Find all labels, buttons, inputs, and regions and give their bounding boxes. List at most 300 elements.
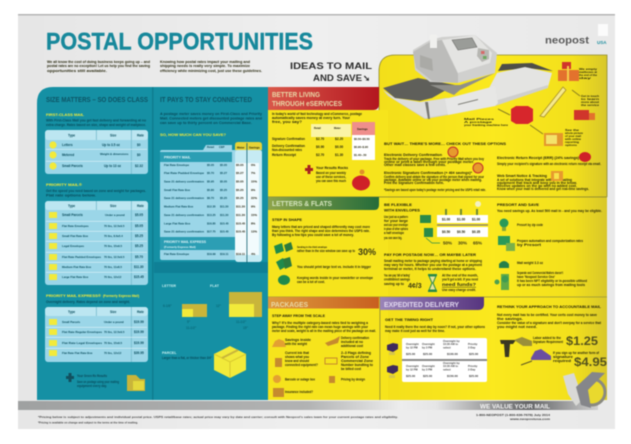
list: package tips: shows what you <box>285 355 309 359</box>
text: presort and save: PRESORT AND SAVE <box>497 203 540 207</box>
table: first-class mail: $2.32 <box>135 164 143 168</box>
list: letter tips: Keeping words inside in your newsletter or envelope <box>297 276 373 280</box>
table: savings comparison: 7% <box>251 171 256 175</box>
table: savings comparison: (Formerly Express Mail) <box>164 245 196 249</box>
table: envelope savings: 65% <box>473 240 482 246</box>
table: savings comparison: Savings <box>249 146 260 150</box>
text: pay for postage now or maybe later: Small mailing meter to package paying starting at home or shipping <box>384 259 482 263</box>
text: pay for postage now or maybe later: terminal or meter, it helps to understand these options. <box>384 267 476 271</box>
table: priority mail: Small Flat Rate Box <box>62 234 89 238</box>
table: savings comparison: Meter <box>237 146 245 150</box>
table: envelope savings: $1.00 <box>442 218 450 222</box>
option: electronic signature confirmation: Electronic Signature Confirmation (+ 46¢ savings)* <box>384 171 472 175</box>
icon: computer screen: whole picture <box>565 132 584 135</box>
table: savings comparison: $19.11 <box>220 252 229 256</box>
text: be flexible with envelopes: BE FLEXIBLE <box>384 203 413 207</box>
text: presort and save: It has been NFT eligibility or in-possible utilised <box>517 279 587 283</box>
table: expedited delivery: $25.00 <box>469 352 479 356</box>
text: step away from the scale: Why? It's the multiple category-based rates tied to weighing a <box>272 321 368 325</box>
table: priority mail express: 70 lbs, 12x12 <box>104 351 122 355</box>
table: savings comparison: Save 21 delivery confirmation <box>164 230 204 234</box>
table: priority mail express: $19.99 <box>134 341 144 345</box>
list: letter tips: You should print large text vs. include it in bigger <box>297 265 372 269</box>
table: expedited delivery: by 12 PM <box>406 368 418 372</box>
table: savings comparison: $17.75 <box>207 230 216 234</box>
text: be flexible with envelopes: in place of other options <box>384 227 408 231</box>
table: eservices savings: Return Receipt <box>272 153 297 157</box>
eservices intro: automatically saves money at every turn. Your <box>272 116 351 120</box>
icon: delivery van: to learn <box>581 97 600 101</box>
table: priority mail <box>45 201 148 285</box>
text: be flexible with envelopes: Use just as a pattern <box>384 215 408 219</box>
table: expedited delivery: $25.00 <box>469 374 479 378</box>
table: priority mail express: Flat Rate Flat Rate Box <box>62 351 93 355</box>
list: package tips: with the weight <box>284 342 308 346</box>
text: step away from the scale <box>272 314 376 333</box>
option: electronic signature confirmation: Print the Signature Confirmation form. <box>384 181 444 185</box>
footer text: *Pricing is available on change and subject to the terms at the time of mailing. <box>38 420 138 424</box>
text: step in shape <box>272 218 370 237</box>
intro text: Knowing how postal rates impact your mailing and <box>160 60 250 64</box>
table: expedited delivery: $100.00 <box>447 352 458 356</box>
table: expedited delivery: $25.00 <box>423 352 433 356</box>
table: expedited delivery: by 3 PM <box>422 368 433 372</box>
text: pay for postage now or maybe later: Use easy charge credit. <box>442 288 476 292</box>
callout: your green results <box>66 373 145 391</box>
table: first-class mail: $0 <box>137 143 141 147</box>
header: packages <box>268 297 379 309</box>
table: priority mail: 70 lbs, 12.5x9.5 <box>104 224 125 228</box>
table: eservices savings: $2.20 <box>335 137 343 141</box>
diagram: flat: 12" <box>216 304 222 308</box>
list: package tips: Commercial Zone <box>341 359 373 363</box>
table: savings comparison: $5.05 <box>236 163 244 167</box>
text: presort and save: by Presort <box>517 243 542 247</box>
table: savings comparison: $12.35 <box>207 204 216 208</box>
icon: delivery van: the service <box>581 103 600 107</box>
table: first-class mail: Metered <box>62 153 74 157</box>
table: priority mail: 70 lbs, 11x8.5 <box>104 265 122 269</box>
table: expedited delivery: $25.00 <box>406 374 416 378</box>
icon: computer screen: options <box>565 144 578 147</box>
text: rethink your approach: the savings. <box>497 317 523 321</box>
text: step in shape: STEP IN SHAPE <box>272 218 302 222</box>
text: step in shape: than you think. The right shape and size determines the USPS rate. <box>272 229 370 233</box>
table: priority mail: Size <box>110 204 117 208</box>
list: letter tips: Sending in the third envelope <box>297 245 327 249</box>
table: envelope savings: $1.00 <box>472 218 480 222</box>
bottom band <box>18 401 598 410</box>
table: savings comparison: $15.45 <box>236 230 246 234</box>
table: expedited delivery: select <box>443 368 451 372</box>
price callout: stapler 1.25: Signature Requirement <box>533 340 564 344</box>
table: priority mail: Rate <box>137 204 144 208</box>
text: step in shape: By following a few tips you could save a lot of money. <box>272 233 354 237</box>
callout: your green results: equipment every day. <box>77 384 107 388</box>
heading: ideas to mail and save: ➘ <box>363 73 370 83</box>
table: expedited delivery: Overnight <box>406 342 419 346</box>
option: but wait heading: BUT WAIT… THERE'S MORE… CHECK OUT THESE OPTIONS <box>384 142 507 146</box>
icon: pencil connector <box>540 87 566 117</box>
table: savings comparison: $5.25 <box>220 196 227 200</box>
table: eservices savings: Delivery Confirmation <box>272 144 305 148</box>
table: savings comparison: PRIORITY MAIL EXPRESS <box>164 240 207 244</box>
intro text: efficiency while minimizing cost, just use these guidelines. <box>160 69 262 73</box>
price callout: purple 4.95: If you sign up for another form of <box>553 351 600 355</box>
table: first-class mail: Letters <box>62 143 73 147</box>
table: first-class mail: Up to 13 oz <box>104 164 121 168</box>
option: electronic delivery confirmation: Other mail classes save a few cents. <box>384 163 446 167</box>
text: pay for postage now or maybe later: saving up to <box>384 282 404 286</box>
diagram: flat <box>210 284 262 330</box>
table: priority mail: Medium Flat Rate Box <box>62 265 92 269</box>
table: priority mail: $15.45 <box>134 275 144 279</box>
stay connected text: A postage meter saves money on First-Class and Priority <box>160 112 262 116</box>
heading: it pays to stay connected: IT PAYS TO STAY CONNECTED <box>160 97 252 104</box>
text: presort and save: Prepare automation and computerization rates <box>517 239 583 243</box>
table: eservices savings: $0.90 <box>316 145 324 149</box>
neopost logo: neopost <box>545 34 590 46</box>
table: priority mail: $5.05 <box>135 213 143 217</box>
table: priority mail: $5.25 <box>135 234 143 238</box>
text: get the timing right: GET THE TIMING RIGHT <box>385 318 434 322</box>
table: eservices savings: $2.70 <box>316 137 324 141</box>
table: savings comparison: $11.30 <box>220 213 229 217</box>
option: electronic signature confirmation: *Savings are based upon today's postage meter pricing and the USPS retail rate. <box>384 188 486 192</box>
table: priority mail: 70 lbs, 15x9.5 <box>104 244 122 248</box>
text: rethink your approach: you might not need. <box>497 325 537 329</box>
text: presort and save: Mail weight 3.3 oz <box>517 261 543 265</box>
table: priority mail express: Under a pound <box>104 320 124 324</box>
tagline: we value your mail: WE VALUE YOUR MAIL <box>480 404 550 410</box>
tagline: we value your mail <box>476 404 551 421</box>
icon: computer screen: of your mail <box>565 135 581 138</box>
text: step away from the scale: STEP AWAY FROM THE SCALE <box>272 314 325 318</box>
text: pay for postage now or maybe later: may vary for hours. Whether you use the postage at a payment <box>384 263 483 267</box>
table: priority mail: Large Flat Rate Box <box>62 275 89 279</box>
panel: teal <box>37 87 268 400</box>
table: savings comparison: CBP <box>219 145 225 149</box>
option: electronic return receipt: Simply your recipient's signature with an electronic return receipt via email. <box>497 162 601 166</box>
table: savings comparison: $19.99 <box>207 252 216 256</box>
priority mail intro: Flat rate options below. <box>46 194 96 198</box>
table: eservices savings: Meter <box>334 127 341 130</box>
table: eservices savings: $0.00 <box>335 145 343 149</box>
price callout: purple 4.95: signature <box>553 355 573 359</box>
list: package tips: Barcode or outage box <box>285 378 315 382</box>
table: priority mail: Type <box>68 204 75 208</box>
first-class mail intro: With First-Class Mail you get fast delivery and forwarding at no <box>46 118 146 122</box>
option: web smart notice and tracking: A set of solutions that integrate with your mailing <box>497 178 572 182</box>
text: presort and save: Presort by zip code <box>517 223 543 227</box>
table: savings comparison: $5.80 <box>207 188 214 192</box>
table: savings comparison: 8% <box>251 222 256 226</box>
table: expedited delivery: 10:30 AM to <box>443 342 458 346</box>
panel: yellow <box>268 35 607 400</box>
table: savings comparison: Save 21 delivery confirmation <box>164 196 204 200</box>
list: package tips: included at no <box>341 340 363 344</box>
intro text: opportunities still available. <box>47 69 107 73</box>
list: letter tips: rather than in the size window can save up to <box>297 249 355 253</box>
table: savings comparison: Medium Flat Rate Box <box>164 204 194 208</box>
table: expedited delivery: Priority <box>468 364 478 368</box>
table: savings comparison: $13.25 <box>207 213 216 217</box>
price callout: purple 4.95 <box>521 349 607 369</box>
table: savings comparison: 13% <box>251 230 257 234</box>
table: savings comparison: Save 21 delivery confirmation <box>164 180 204 184</box>
table: envelope savings: $0.50 <box>442 230 450 234</box>
table: savings comparison: 0% <box>251 163 256 167</box>
callout: your results: piggy <box>305 165 370 190</box>
priority mail intro: PRIORITY MAIL® <box>46 182 82 187</box>
option: electronic return receipt: Electronic Return Receipt (ERR) (24% savings) <box>497 156 580 160</box>
icon: delivery van: more about <box>581 100 599 104</box>
table: eservices savings: $2.70 <box>316 153 324 157</box>
table: first-class mail: Type <box>68 134 75 138</box>
icon: computer screen: with online <box>565 138 582 141</box>
option: electronic signature confirmation: package. Available online or via your postage meter when mailing. <box>384 178 482 182</box>
list: package tips: connected equipment? <box>285 363 318 367</box>
text: step away from the scale: package. Finding the right rate can mean huge savings with your <box>272 325 369 329</box>
text: be flexible with envelopes: for your large <box>384 219 408 223</box>
table: savings comparison: Retail <box>207 145 214 149</box>
priority mail express intro: PRIORITY MAIL EXPRESS® <box>46 293 101 298</box>
table: eservices savings: Non-discounted rates <box>272 148 302 152</box>
table: priority mail express: Small Parcels <box>62 320 81 324</box>
text: presort and save: Separate and Commercial Mailers doesn't <box>517 271 564 275</box>
table: eservices savings <box>272 122 375 160</box>
icon: red package: Mail Pieces <box>464 117 495 121</box>
table: expedited delivery: 2-Day <box>468 368 476 372</box>
table: savings comparison <box>160 142 262 263</box>
table: first-class mail: Size <box>110 134 117 138</box>
text: step in shape: Many letters that are priced and shaped differently may cost more <box>272 225 370 229</box>
list: package tips: 2–3 Flags defining <box>341 351 371 355</box>
text: presort and save <box>494 203 602 290</box>
text: be flexible with envelopes: WITH ENVELOPES <box>384 208 420 212</box>
table: savings comparison: $16.85 <box>207 222 216 226</box>
subheading: so how much can you save: SO, HOW MUCH CAN YOU SAVE? <box>160 132 227 137</box>
header: packages: PACKAGES <box>271 300 308 309</box>
heading: ideas to mail and save: IDEAS TO MAIL <box>290 61 373 71</box>
icon: delivery van <box>572 90 600 120</box>
table: priority mail: 70 lbs, 8.6x5.4 <box>104 234 123 238</box>
icon: red package: A postage <box>464 120 493 124</box>
table: priority mail express: Flat Rate Regular Envelopes <box>62 330 102 334</box>
table: first-class mail: $0 <box>137 153 141 157</box>
diagram: letter <box>162 284 207 330</box>
table: priority mail express: 70 lbs, 15x9.5 <box>104 341 122 345</box>
table: priority mail express: $39.95 <box>134 351 144 355</box>
table: priority mail: $11.30 <box>134 265 144 269</box>
diagram: letter: 5" <box>187 320 191 324</box>
table: savings comparison: 15% <box>251 213 257 217</box>
franking machine illustration <box>383 35 553 119</box>
text: pay for postage now or maybe later: need funds? <box>442 282 476 287</box>
footer text: *Pricing below is subject to adjustments and individual postal price. USPS retail/base rates; actual price may vary by date and carrier; consult with Neopost's sales team for your current postage rates and eligibility. <box>38 415 398 419</box>
priority mail intro <box>46 182 146 198</box>
table: expedited delivery: Priority <box>468 342 478 346</box>
text: get the timing right <box>385 318 485 333</box>
table: eservices savings: Signature Confirmation <box>272 137 305 141</box>
icon: stacked boxes: day <box>579 76 592 80</box>
table: expedited delivery: 2-Day <box>468 346 476 350</box>
table: first-class mail <box>45 130 148 174</box>
text: presort and save: up or as much savings from mailing tools <box>517 283 585 287</box>
text: pay for postage now or maybe later: You can pay 'bill of lading' <box>384 274 410 278</box>
table: priority mail express: $19.99 <box>134 330 144 334</box>
list: package tips: Current ink that <box>285 351 310 355</box>
list: package tips: Delivery confirmation <box>341 336 369 340</box>
table: priority mail: 70 lbs, 12x12 <box>104 275 122 279</box>
header: expedited delivery <box>380 297 484 310</box>
icon: red package <box>464 106 533 127</box>
neopost logo <box>545 24 608 46</box>
title: POSTAL OPPORTUNITIES <box>46 28 313 56</box>
text: step away from the scale: meter and scale, weight is all in the mailing piece of the package on mail. <box>272 329 376 333</box>
table: savings comparison: $11.30 <box>236 204 245 208</box>
priority mail express intro: Overnight delivery. Rates depend on zone and weight. <box>46 300 130 304</box>
stay connected text <box>160 112 262 125</box>
table: expedited delivery: select <box>443 346 451 350</box>
table: savings comparison: $5.05 <box>220 163 227 167</box>
table: savings comparison: PRIORITY MAIL <box>164 156 191 160</box>
table: savings comparison: $5.25 <box>236 188 244 192</box>
option: electronic delivery confirmation: Electronic Delivery Confirmation <box>384 153 443 157</box>
diagram: letter: 6-1/8" <box>163 304 172 308</box>
option: electronic delivery confirmation: Track the delivery of your package. Free with Priority Mail when you buy <box>384 157 484 161</box>
table: expedited delivery: 10:30 AM to <box>443 364 458 368</box>
intro text: shipping needs is really very simple. To maximize <box>160 64 250 68</box>
eservices intro: free, you say? <box>272 120 302 124</box>
heading: size matters: SIZE MATTERS – SO DOES CLASS <box>46 97 148 104</box>
intro text: postal rates are no exception! Let us help you find the saving <box>47 64 150 68</box>
table: priority mail express: Flat Rate Legal Envelopes <box>62 341 102 345</box>
list: package tips: be billed cost <box>341 367 362 371</box>
diagram: letter: LETTER <box>162 284 176 288</box>
icon: computer screen: reporting <box>565 141 580 144</box>
icon: delivery van: Get in touch <box>581 94 599 98</box>
diagram: flat: 15" <box>243 326 249 330</box>
price callout: purple 4.95: required <box>553 359 571 363</box>
callout: your results: piggy: Your Results Rocks <box>316 166 348 170</box>
list: package tips: Parcels of Zone <box>341 355 369 359</box>
callout: your green results: Your Green Rx Results <box>77 374 107 378</box>
table: envelope savings <box>437 201 488 246</box>
table: savings comparison: Flat Rate Envelope <box>164 163 189 167</box>
table: priority mail express <box>45 307 148 362</box>
table: savings comparison: Flat Rate Envelope <box>164 252 189 256</box>
list: letter tips <box>274 242 376 285</box>
icon: stacked boxes <box>558 62 598 81</box>
text: pay for postage now or maybe later: you'll get a bill. If you need <box>442 278 478 282</box>
text: pay for postage now or maybe later: 4¢/3 <box>408 283 422 290</box>
table: envelope savings: 50% <box>443 240 452 246</box>
icon: stacked boxes: We empty <box>579 67 598 71</box>
table: priority mail: Under a pound <box>105 213 125 217</box>
option: electronic delivery confirmation: online or print a label through your postage meter. <box>384 160 474 164</box>
table: eservices savings: $0.50–$0.50 <box>354 137 370 141</box>
table: savings comparison: $19.11 <box>236 252 245 256</box>
footer text <box>38 415 398 424</box>
header: letters and flats <box>268 197 379 210</box>
tagline: we value your mail: 1-800-NEOPOST (1-800-636-7678) July 2014 <box>476 413 551 417</box>
price callout: stapler 1.25: $1.25 <box>566 334 598 348</box>
priority mail express intro <box>46 293 139 304</box>
text: be flexible with envelopes <box>384 203 420 240</box>
option: web smart notice and tracking: equipment that track and keep you in the know. <box>497 181 577 185</box>
text: pay for postage now or maybe later: At the end of the month, <box>442 274 478 278</box>
header: better living through eservices <box>268 87 379 110</box>
table: expedited delivery: by 12 PM <box>406 346 418 350</box>
table: expedited delivery: by 3 PM <box>422 346 433 350</box>
table: priority mail: $5.25 <box>135 244 143 248</box>
diagram: parcel <box>162 346 246 378</box>
table: expedited delivery: $150.00 <box>447 374 458 378</box>
diagram: flat: 11-1/2" <box>236 320 247 324</box>
table: expedited delivery: Overnight <box>422 342 435 346</box>
table: eservices savings: $1.40–.50 <box>354 153 367 157</box>
table: savings comparison: $5.25 <box>220 188 227 192</box>
table: savings comparison: $5.27 <box>236 171 244 175</box>
list: letter tips: 30% <box>358 247 376 257</box>
text: rethink your approach: Consider the value of a signature and don't overpay for a service that <box>497 321 602 325</box>
table: priority mail express: 70 lbs, 12.5x9.5 <box>104 330 125 334</box>
text: presort and save: You need savings up. As least 500 mail in - and you may be eligible. <box>497 209 602 213</box>
list: package tips: know and should <box>285 359 309 363</box>
table: savings comparison: $15.45 <box>236 222 246 226</box>
table: savings comparison: $11.30 <box>236 213 245 217</box>
option: electronic signature confirmation <box>384 163 486 192</box>
heading: ideas to mail and save <box>290 61 373 83</box>
heading: ideas to mail and save: AND SAVE <box>313 73 362 83</box>
table: priority mail: Flat Rate Padded Envelopes <box>62 255 101 259</box>
table: expedited delivery: Overnight by <box>443 339 460 343</box>
table: eservices savings: $1.30 <box>335 153 343 157</box>
table: expedited delivery: Overnight by <box>443 361 460 365</box>
text: rethink your approach: Not every mail has to be certified. Your certs cost money to save <box>497 313 597 317</box>
table: expedited delivery <box>387 338 487 382</box>
price callout: stapler 1.25: Labor added to the <box>533 336 561 340</box>
table: savings comparison: $5.95 <box>207 180 214 184</box>
table: savings comparison: $11.30 <box>220 204 229 208</box>
icons: envelopes <box>420 215 440 243</box>
table: priority mail express: Rate <box>137 310 144 314</box>
header: better living through eservices: BETTER LIVING <box>272 90 320 99</box>
header: better living through eservices: THROUGH eSERVICES <box>272 99 342 108</box>
header: letters and flats: LETTERS & FLATS <box>272 199 332 208</box>
table: first-class mail: Rate <box>137 134 144 138</box>
table: savings comparison: $15.45 <box>220 222 229 226</box>
table: eservices savings: Savings <box>357 127 368 131</box>
table: savings comparison: 9% <box>251 188 256 192</box>
list: letter tips: can be a lot of cost. <box>297 280 325 284</box>
priority mail express intro: (Formerly Express Mail) <box>103 294 139 298</box>
text: be flexible with envelopes: a half envelope <box>384 231 404 235</box>
table: savings comparison: Large Flat Rate Box <box>164 222 191 226</box>
tagline: we value your mail: www.neopostusa.com <box>509 417 551 421</box>
option: web smart notice and tracking: Know when your mail is delivered and get real-time savings. <box>497 187 589 191</box>
list: package tips: Pricing by design <box>341 378 365 382</box>
text: presort and save: have 'Neopost Service One' <box>517 275 555 279</box>
table: savings comparison: $5.27 <box>220 171 227 175</box>
table: expedited delivery: Overnight <box>422 364 435 368</box>
table: priority mail express: Type <box>68 310 75 314</box>
callout: your results: piggy: Based on your weekly <box>316 171 346 175</box>
table: expedited delivery: $25.00 <box>423 374 433 378</box>
eservices intro: In today's world of fast technology and eCommerce, postage <box>272 112 362 116</box>
table: envelope savings: 30% <box>458 240 467 246</box>
